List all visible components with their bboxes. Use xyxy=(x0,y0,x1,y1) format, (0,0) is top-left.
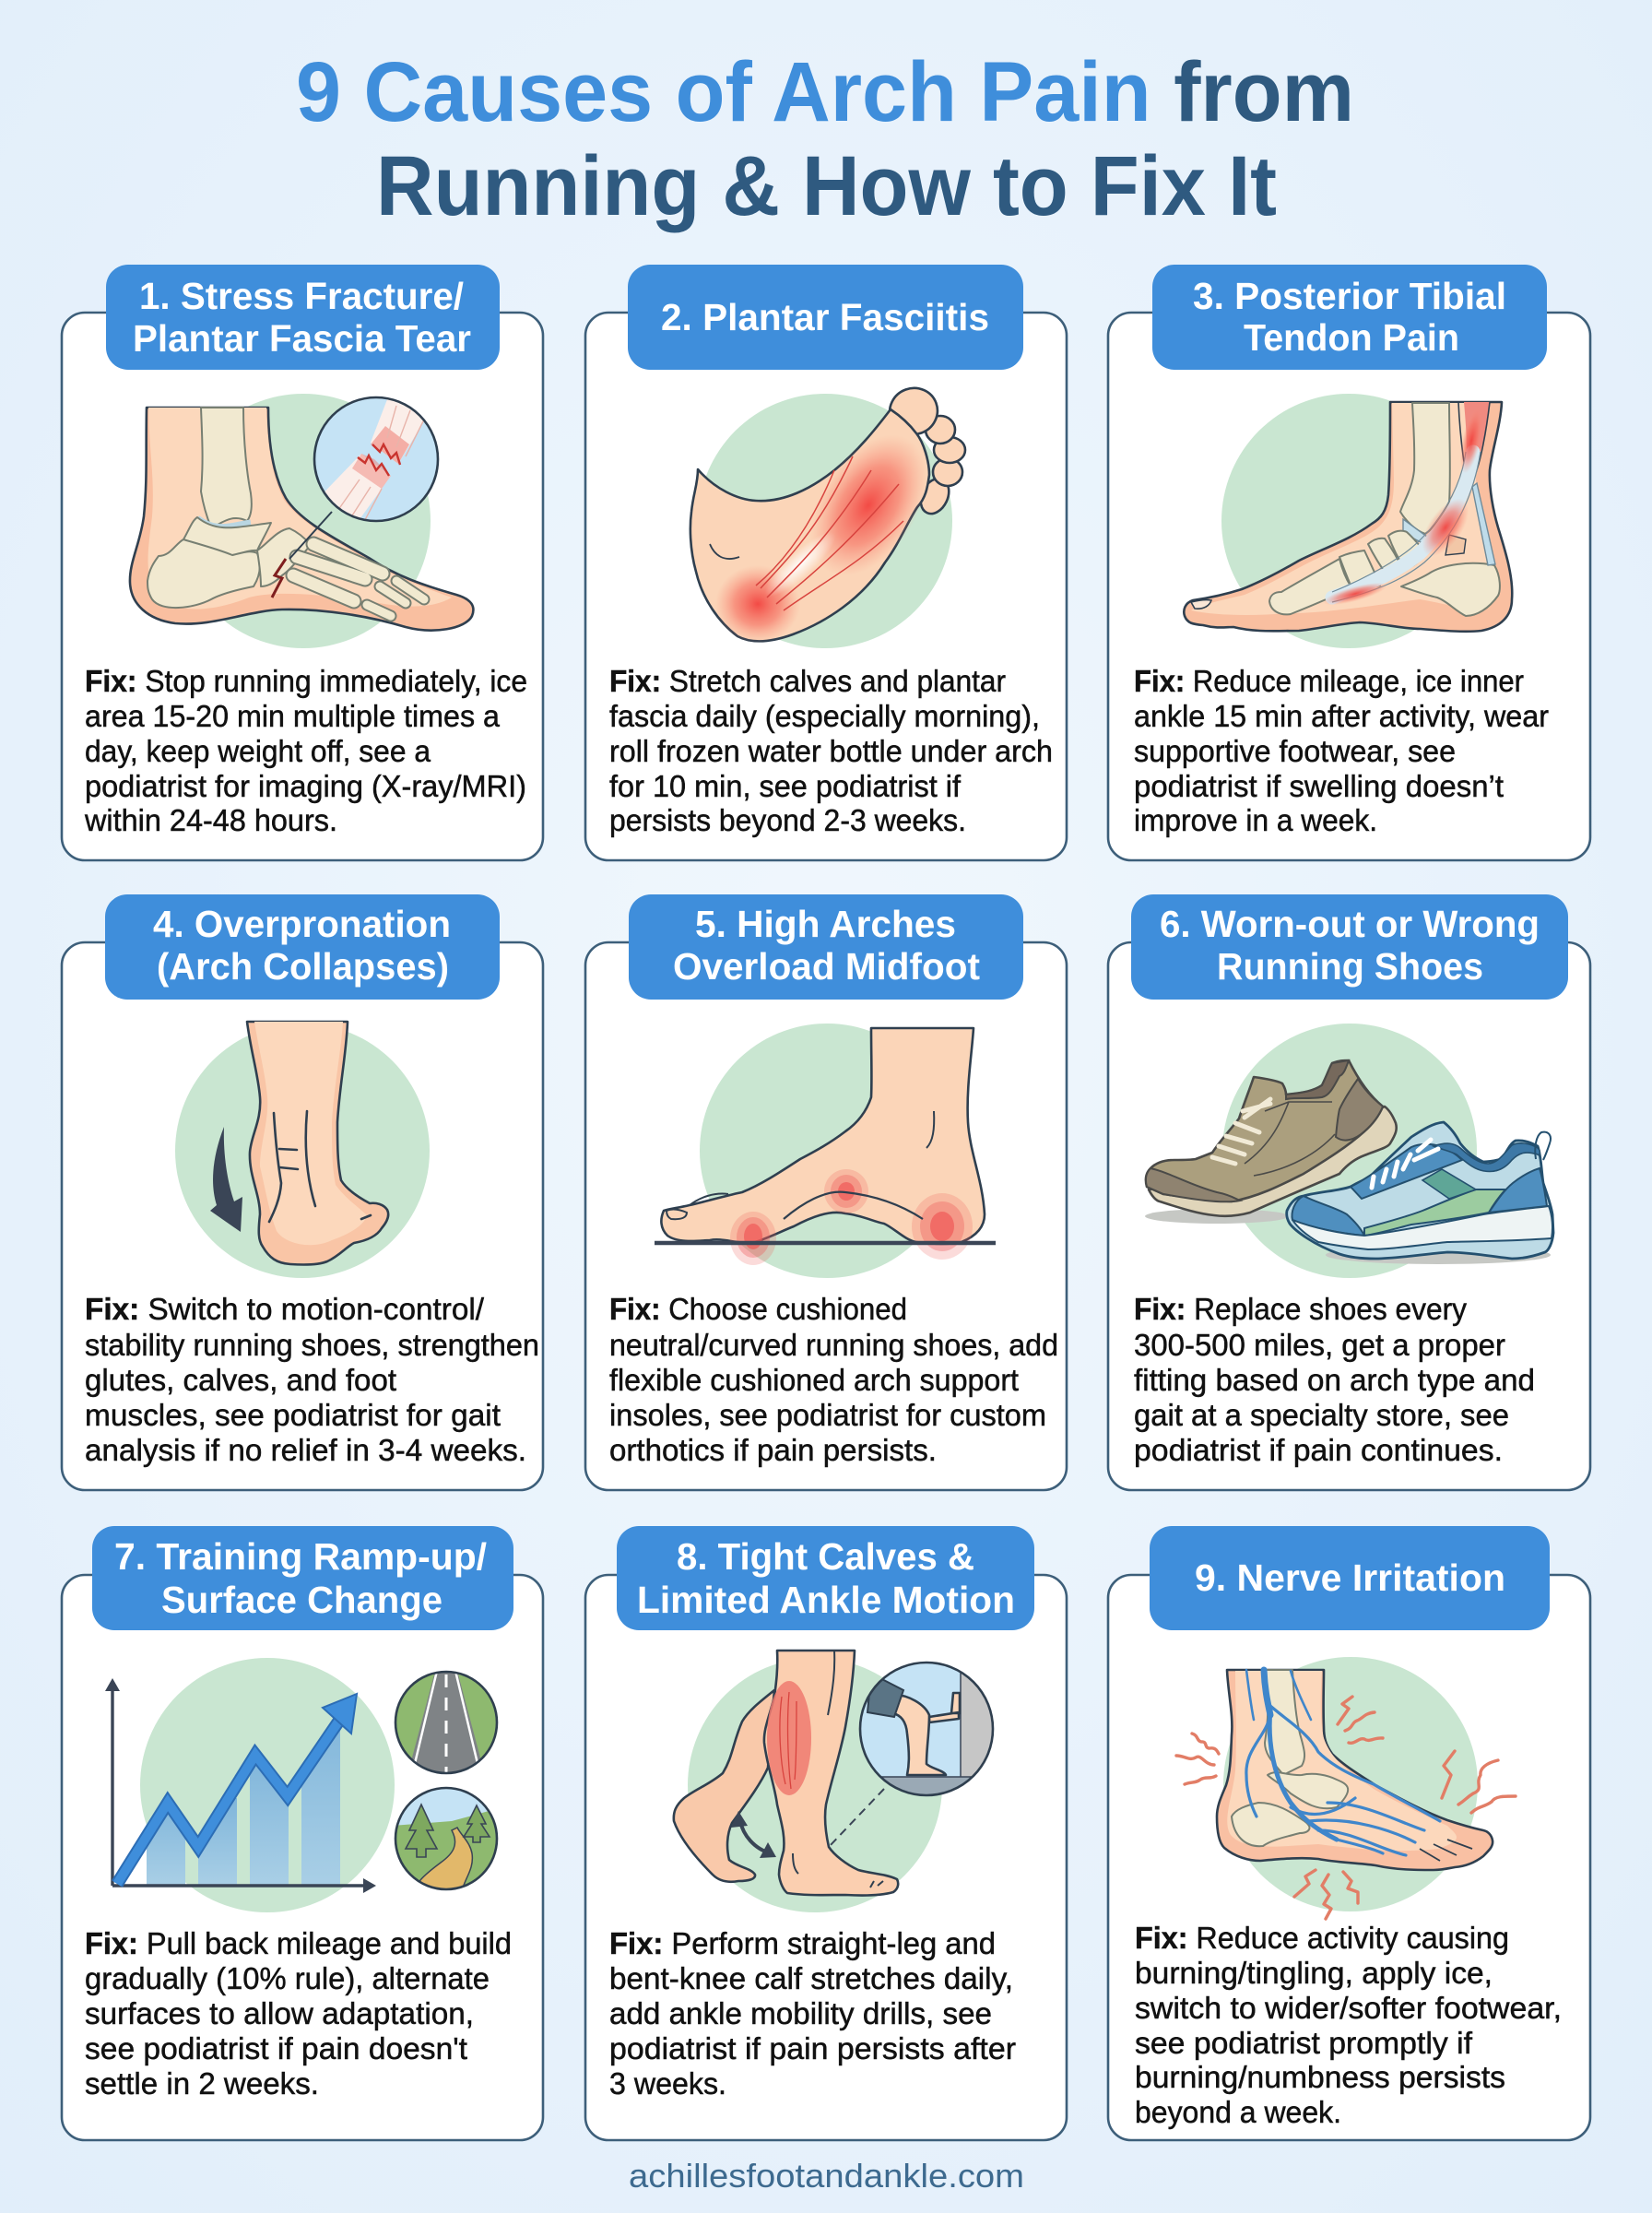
fix text 9: burning/tingling, apply ice, xyxy=(1135,1957,1493,1991)
icon: trail with trees xyxy=(395,1787,498,1890)
fix text 9: beyond a week. xyxy=(1135,2096,1341,2130)
panel: cause 5 high arches xyxy=(585,894,1067,1490)
fix text 2: persists beyond 2-3 weeks. xyxy=(609,804,966,838)
card frame xyxy=(585,942,1067,1490)
heading tab 6: Running Shoes xyxy=(1217,945,1483,988)
worn shoe xyxy=(1146,1060,1397,1216)
panel: cause 7 training ramp-up xyxy=(62,1526,543,2140)
fix text 5 xyxy=(609,1293,1058,1468)
card frame xyxy=(62,942,543,1490)
card frame xyxy=(1108,1575,1590,2140)
panel: cause 6 worn shoes xyxy=(1108,894,1590,1490)
fix text 1: area 15-20 min multiple times a xyxy=(85,700,500,734)
heading tab 3: 3. Posterior Tibial xyxy=(1193,275,1506,317)
fix text 3: Fix: Reduce mileage, ice inner xyxy=(1134,665,1524,699)
fix text 8: Fix: Perform straight-leg and xyxy=(609,1927,996,1961)
fix text 4: glutes, calves, and foot xyxy=(85,1364,397,1398)
panel: cause 4 overpronation xyxy=(62,894,543,1490)
fix text 1: day, keep weight off, see a xyxy=(85,735,431,769)
heading tab 7: 7. Training Ramp-up/ xyxy=(114,1535,487,1578)
fix text 9 xyxy=(1135,1922,1562,2130)
heading tab 7 xyxy=(92,1526,513,1630)
heading tab 8 xyxy=(617,1526,1034,1630)
fix text 1: podiatrist for imaging (X-ray/MRI) xyxy=(85,770,526,804)
icon: high arch foot with pressure points xyxy=(655,1024,996,1278)
fix text 6: gait at a specialty store, see xyxy=(1134,1399,1509,1433)
fix text 2: roll frozen water bottle under arch xyxy=(609,735,1053,769)
icon: paved road xyxy=(395,1671,497,1775)
fix text 3: podiatrist if swelling doesn’t xyxy=(1134,770,1504,804)
heading tab 7: Surface Change xyxy=(161,1579,442,1621)
card frame xyxy=(1108,313,1590,860)
fix text 3 xyxy=(1134,665,1549,838)
heading tab 2: 2. Plantar Fasciitis xyxy=(661,296,989,338)
fix text 7: surfaces to allow adaptation, xyxy=(85,1997,474,2031)
heading tab 8: 8. Tight Calves & xyxy=(677,1535,974,1578)
fix text 2: Fix: Stretch calves and plantar xyxy=(609,665,1006,699)
heading tab 1: Plantar Fascia Tear xyxy=(133,317,471,360)
heading tab 9: 9. Nerve Irritation xyxy=(1195,1556,1505,1599)
panel: cause 9 nerve irritation xyxy=(1108,1526,1590,2140)
heading tab 4: (Arch Collapses) xyxy=(157,945,449,988)
bar chart xyxy=(147,1731,340,1885)
fix text 8 xyxy=(609,1927,1016,2101)
fix text 4: analysis if no relief in 3-4 weeks. xyxy=(85,1434,526,1468)
icon: legs with tight calf and stretch callout xyxy=(674,1651,997,1912)
heading tab 5 xyxy=(629,894,1023,1000)
fix text 1 xyxy=(84,665,527,838)
title xyxy=(296,45,1354,233)
icon: foot sole with inflamed fascia xyxy=(690,382,965,648)
heading tab 6 xyxy=(1131,894,1568,1000)
heading tab 4 xyxy=(105,894,500,1000)
heading tab 5: 5. High Arches xyxy=(695,903,956,945)
fix text 7: settle in 2 weeks. xyxy=(85,2067,319,2101)
fix text 4: Fix: Switch to motion-control/ xyxy=(85,1293,485,1327)
footer website: achillesfootandankle.com xyxy=(629,2157,1024,2195)
heading tab 1: 1. Stress Fracture/ xyxy=(139,275,464,317)
heading tab 6: 6. Worn-out or Wrong xyxy=(1160,903,1540,945)
fix text 9: switch to wider/softer footwear, xyxy=(1135,1992,1562,2026)
fix text 2 xyxy=(609,665,1053,838)
fix text 2: for 10 min, see podiatrist if xyxy=(609,770,962,804)
tingling marks xyxy=(1176,1697,1516,1919)
fix text 4 xyxy=(85,1293,539,1468)
fix text 9: Fix: Reduce activity causing xyxy=(1135,1922,1509,1956)
fix text 6: fitting based on arch type and xyxy=(1134,1364,1535,1398)
fix text 7 xyxy=(85,1927,512,2101)
fix text 4: stability running shoes, strengthen xyxy=(85,1329,539,1363)
fix text 9: burning/numbness persists xyxy=(1135,2061,1505,2095)
title: 9 Causes of Arch Pain from xyxy=(296,45,1354,139)
heading tab 3: Tendon Pain xyxy=(1244,316,1459,359)
fix text 1: Fix: Stop running immediately, ice xyxy=(85,665,527,699)
icon: ankle with inflamed tendon xyxy=(1184,394,1512,648)
fix text 7: gradually (10% rule), alternate xyxy=(85,1962,490,1996)
fix text 3: ankle 15 min after activity, wear xyxy=(1134,700,1549,734)
fix text 5: orthotics if pain persists. xyxy=(609,1434,937,1468)
panel: cause 3 posterior tibial tendon xyxy=(1108,265,1590,860)
icon: foot skeleton with fracture callout xyxy=(130,394,473,648)
fix text 6: Fix: Replace shoes every xyxy=(1134,1293,1467,1327)
panel: cause 2 plantar fasciitis xyxy=(585,265,1067,860)
fix text 8: podiatrist if pain persists after xyxy=(609,2032,1016,2066)
icon: foot with nerves and tingling marks xyxy=(1176,1657,1516,1919)
fix text 5: insoles, see podiatrist for custom xyxy=(609,1399,1046,1433)
card frame xyxy=(585,313,1067,860)
heading tab 4: 4. Overpronation xyxy=(153,903,451,945)
fix text 5: neutral/curved running shoes, add xyxy=(609,1329,1058,1363)
fix text 4: muscles, see podiatrist for gait xyxy=(85,1399,502,1433)
fix text 8: bent-knee calf stretches daily, xyxy=(609,1962,1013,1996)
title: Running & How to Fix It xyxy=(376,139,1277,233)
fix text 5: flexible cushioned arch support xyxy=(609,1364,1020,1398)
card frame xyxy=(62,1575,543,2140)
fix text 6: podiatrist if pain continues. xyxy=(1134,1434,1503,1468)
fix text 5: Fix: Choose cushioned xyxy=(609,1293,907,1327)
fix text 2: fascia daily (especially morning), xyxy=(609,700,1040,734)
icon: rear foot with inward arrow xyxy=(175,1022,430,1278)
icon: worn shoe and new shoe xyxy=(1145,1024,1553,1278)
fix text 8: add ankle mobility drills, see xyxy=(609,1997,992,2031)
panel: cause 1 stress fracture xyxy=(62,265,543,860)
heading tab 5: Overload Midfoot xyxy=(673,945,980,988)
fix text 3: supportive footwear, see xyxy=(1134,735,1456,769)
fix text 6 xyxy=(1134,1293,1535,1468)
heading tab 3 xyxy=(1152,265,1547,370)
fix text 6: 300-500 miles, get a proper xyxy=(1134,1329,1505,1363)
fix text 8: 3 weeks. xyxy=(609,2067,726,2101)
panel: cause 8 tight calves xyxy=(585,1526,1067,2140)
fix text 9: see podiatrist promptly if xyxy=(1135,2027,1473,2061)
fix text 3: improve in a week. xyxy=(1134,804,1377,838)
heading tab 2 xyxy=(628,265,1023,370)
chart: rising mileage with surface icons xyxy=(105,1658,502,1912)
heading tab 9 xyxy=(1150,1526,1550,1630)
card frame xyxy=(1108,942,1590,1490)
heading tab 1 xyxy=(106,265,500,370)
fix text 1: within 24-48 hours. xyxy=(84,804,337,838)
new shoe xyxy=(1287,1122,1553,1259)
card frame xyxy=(62,313,543,860)
fix text 7: see podiatrist if pain doesn't xyxy=(85,2032,468,2066)
card frame xyxy=(585,1575,1067,2140)
heading tab 8: Limited Ankle Motion xyxy=(637,1579,1015,1621)
fix text 7: Fix: Pull back mileage and build xyxy=(85,1927,512,1961)
